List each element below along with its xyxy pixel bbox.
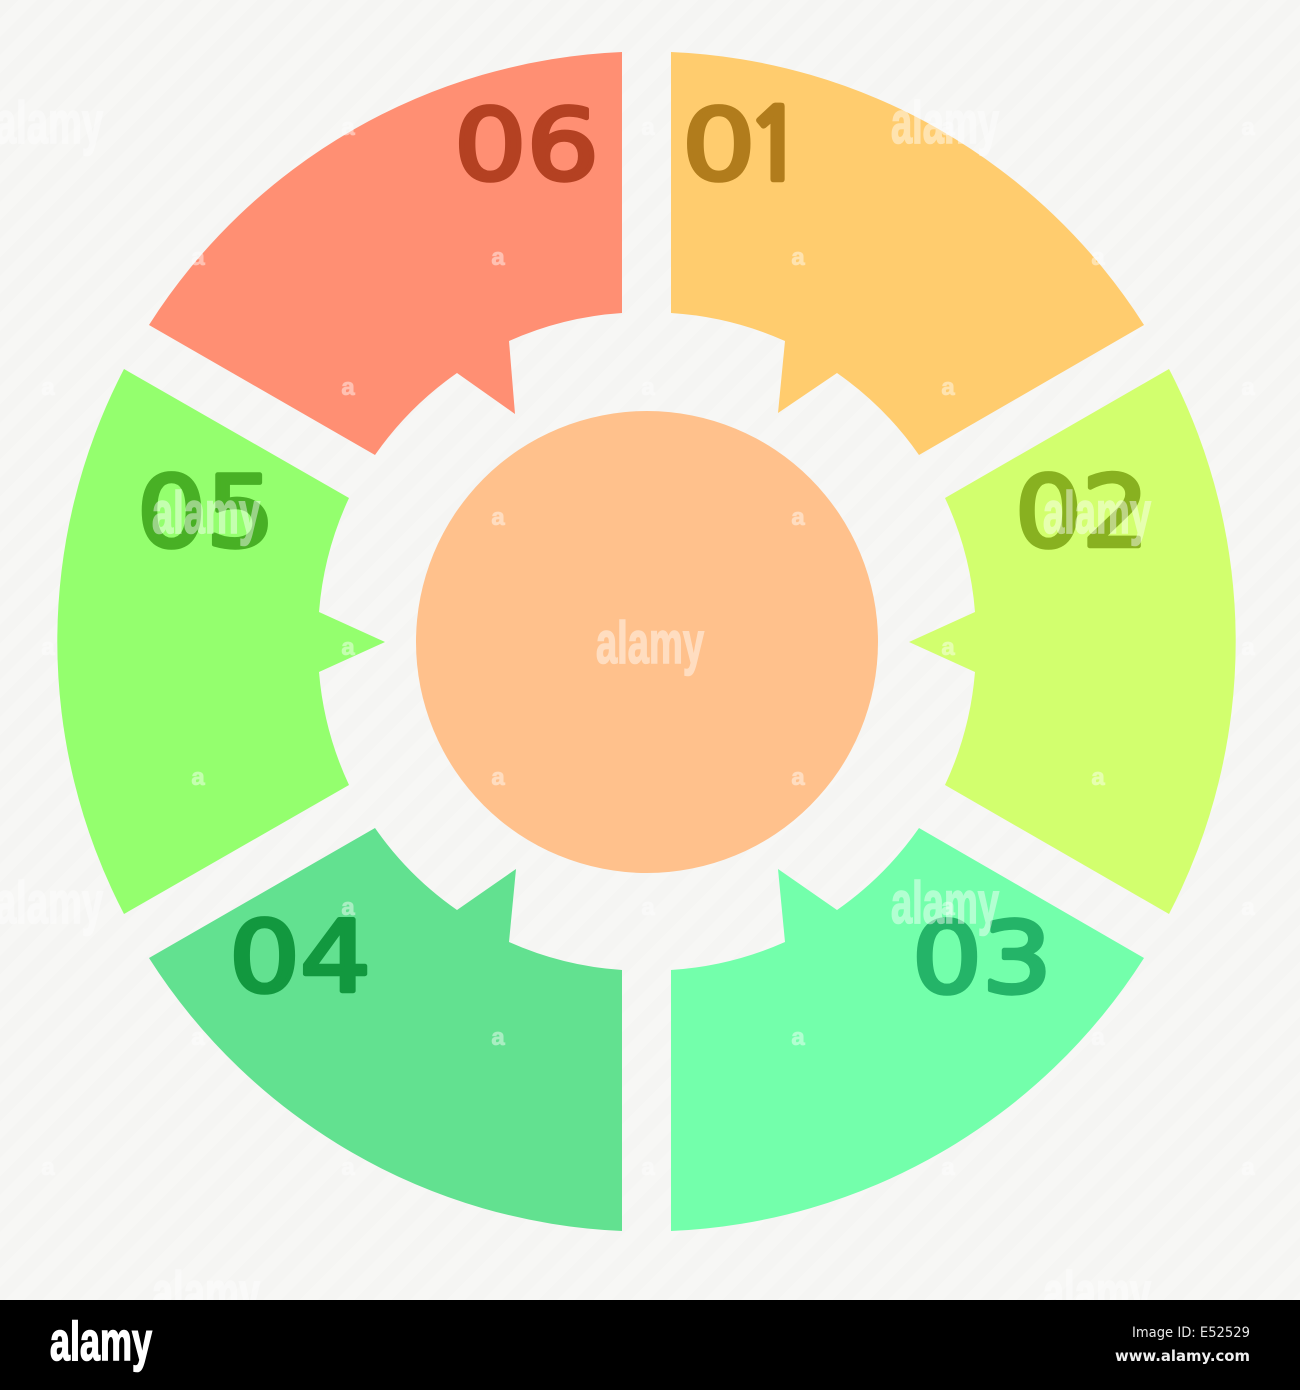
watermark: small repeated marks: a xyxy=(491,764,505,791)
image id: Image ID: E52529 xyxy=(1132,1325,1250,1341)
watermark: small repeated marks: a xyxy=(641,374,655,401)
watermark: small repeated marks: a xyxy=(191,1024,205,1051)
footer bar xyxy=(0,1300,1300,1390)
watermark: small repeated marks: a xyxy=(1091,244,1105,271)
panel: segment 06 xyxy=(149,52,622,455)
watermark: small repeated marks: a xyxy=(341,894,355,921)
watermark: small repeated marks: a xyxy=(791,764,805,791)
watermark: large alamy marks: alamy xyxy=(596,610,704,676)
watermark: small repeated marks: a xyxy=(341,374,355,401)
number 04: 04 xyxy=(229,901,371,1015)
watermark: large alamy marks: alamy xyxy=(891,870,999,936)
number 01: 0 xyxy=(682,89,756,203)
watermark: small repeated marks: a xyxy=(1241,114,1255,141)
watermark: small repeated marks: a xyxy=(191,244,205,271)
panel: segment 04 xyxy=(149,828,622,1231)
number 03: 03 xyxy=(912,902,1052,1016)
number 06: 06 xyxy=(454,89,599,203)
watermark: large alamy marks: alamy xyxy=(152,1260,260,1326)
watermark: small repeated marks: a xyxy=(791,244,805,271)
center circle xyxy=(416,411,878,873)
watermark: small repeated marks: a xyxy=(1091,764,1105,791)
website: www.alamy.com xyxy=(1115,1347,1250,1365)
watermark: large alamy marks: alamy xyxy=(0,870,103,936)
watermark: small repeated marks: a xyxy=(1241,894,1255,921)
number 01 xyxy=(682,89,806,203)
watermark: large alamy marks: alamy xyxy=(891,90,999,156)
watermark: small repeated marks: a xyxy=(641,114,655,141)
watermark: small repeated marks: a xyxy=(41,374,55,401)
watermark: small repeated marks: a xyxy=(41,634,55,661)
watermark: small repeated marks: a xyxy=(41,1154,55,1181)
watermark: small repeated marks xyxy=(41,114,1255,1181)
watermark: small repeated marks: a xyxy=(341,114,355,141)
watermark: small repeated marks: a xyxy=(941,894,955,921)
watermark: small repeated marks: a xyxy=(641,1154,655,1181)
number 05: 05 xyxy=(137,456,275,570)
watermark: large alamy marks: alamy xyxy=(1043,1260,1151,1326)
watermark: small repeated marks: a xyxy=(1091,1024,1105,1051)
watermark: small repeated marks: a xyxy=(941,1154,955,1181)
number 02: 02 xyxy=(1015,456,1149,570)
panel: segment 01 xyxy=(671,52,1144,455)
watermark: small repeated marks: a xyxy=(941,634,955,661)
watermark: small repeated marks: a xyxy=(341,1154,355,1181)
panel: segment 03 xyxy=(671,828,1144,1231)
footer logo: alamy xyxy=(50,1310,152,1372)
watermark: small repeated marks: a xyxy=(941,114,955,141)
watermark: small repeated marks: a xyxy=(791,1024,805,1051)
number 01: 1 xyxy=(745,96,806,195)
watermark: small repeated marks: a xyxy=(491,504,505,531)
watermark: small repeated marks: a xyxy=(491,244,505,271)
watermark: small repeated marks: a xyxy=(1241,1154,1255,1181)
watermark: large alamy marks xyxy=(0,90,1151,1326)
watermark: small repeated marks: a xyxy=(341,634,355,661)
watermark: small repeated marks: a xyxy=(491,1024,505,1051)
watermark: large alamy marks: alamy xyxy=(152,480,260,546)
watermark: small repeated marks: a xyxy=(1241,634,1255,661)
panel: segment 05 xyxy=(57,369,385,914)
watermark: small repeated marks: a xyxy=(941,374,955,401)
watermark: small repeated marks: a xyxy=(641,894,655,921)
watermark: small repeated marks: a xyxy=(1241,374,1255,401)
watermark: small repeated marks: a xyxy=(791,504,805,531)
panel: segment 02 xyxy=(909,369,1236,914)
watermark: small repeated marks: a xyxy=(191,764,205,791)
watermark: large alamy marks: alamy xyxy=(0,90,103,156)
watermark: large alamy marks: alamy xyxy=(1043,480,1151,546)
